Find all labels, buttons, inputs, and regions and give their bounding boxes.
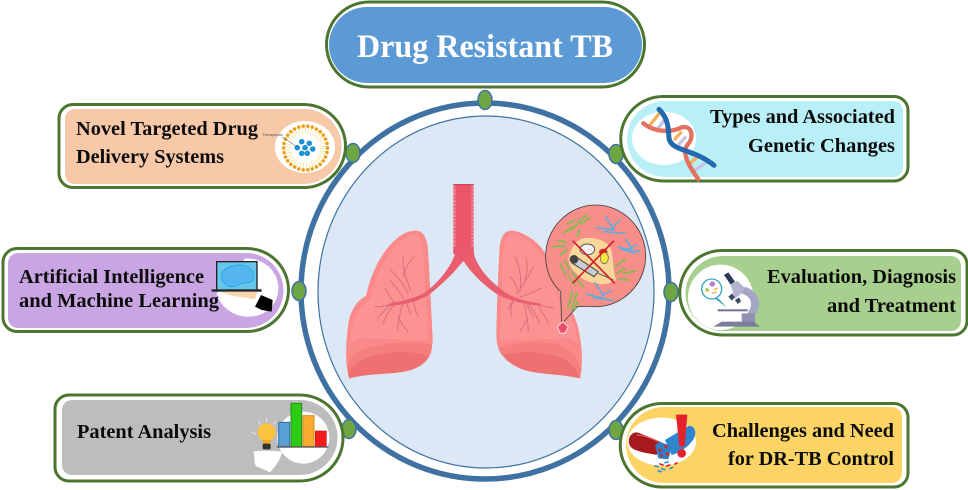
- connector node: middle right: [664, 282, 678, 302]
- panel: evaluation, diagnosis and treatment: [680, 250, 967, 335]
- connector node: middle left: [292, 282, 306, 300]
- title pill: [326, 2, 644, 87]
- connector node: upper left: [346, 144, 360, 162]
- blue bacteria: [586, 217, 640, 301]
- panel: types and associated genetic changes: Genetic Changes: [748, 135, 895, 157]
- icon: liposome: [262, 121, 335, 173]
- panel: novel targeted drug delivery systems: [59, 104, 346, 188]
- icon: microscope: [688, 265, 760, 330]
- text: Novel Targeted Drug: [76, 118, 259, 140]
- panel: challenges and need for DR-TB control: [620, 404, 908, 487]
- connector node: lower left: [342, 420, 356, 438]
- title pill: Drug Resistant TB: [357, 29, 613, 65]
- icon: broken capsule with exclamation mark: [627, 415, 696, 472]
- text: Evaluation, Diagnosis: [767, 266, 956, 288]
- bronchi: [388, 248, 542, 306]
- left lung: [346, 231, 433, 378]
- icon: DNA helix: [632, 109, 714, 179]
- trachea: [453, 184, 474, 254]
- pills and syringe: [570, 244, 613, 280]
- icon: laptop with brain: [212, 258, 278, 317]
- central circle: [301, 103, 669, 479]
- icon: bar chart and lightbulb: [251, 403, 329, 472]
- panel: artificial intelligence and machine learning: [3, 248, 288, 332]
- green bacteria: [553, 215, 636, 310]
- red cross: [573, 241, 615, 283]
- right lung: [496, 231, 582, 378]
- text: Artificial Intelligence: [19, 266, 204, 288]
- callout: resistant bacteria: [546, 205, 646, 333]
- text: Patent Analysis: [77, 421, 211, 443]
- bronchial branches: [375, 257, 553, 332]
- panel: patent analysis: [55, 395, 343, 481]
- panel: novel targeted drug delivery systems: Delivery Systems: [76, 146, 224, 168]
- connector node: lower right: [609, 420, 623, 440]
- icon: liposome: Therapeutic: [262, 132, 283, 137]
- connector node: upper right: [609, 144, 623, 164]
- lungs illustration: [346, 184, 646, 378]
- panel: artificial intelligence and machine learning: and Machine Learning: [19, 290, 220, 312]
- connector node: top: [478, 90, 492, 110]
- panel: evaluation, diagnosis and treatment: and Treatment: [827, 295, 956, 317]
- panel: challenges and need for DR-TB control: for DR-TB Control: [728, 448, 894, 470]
- text: Challenges and Need: [712, 420, 895, 442]
- text: Types and Associated: [710, 106, 896, 128]
- panel: types and associated genetic changes: [621, 96, 908, 181]
